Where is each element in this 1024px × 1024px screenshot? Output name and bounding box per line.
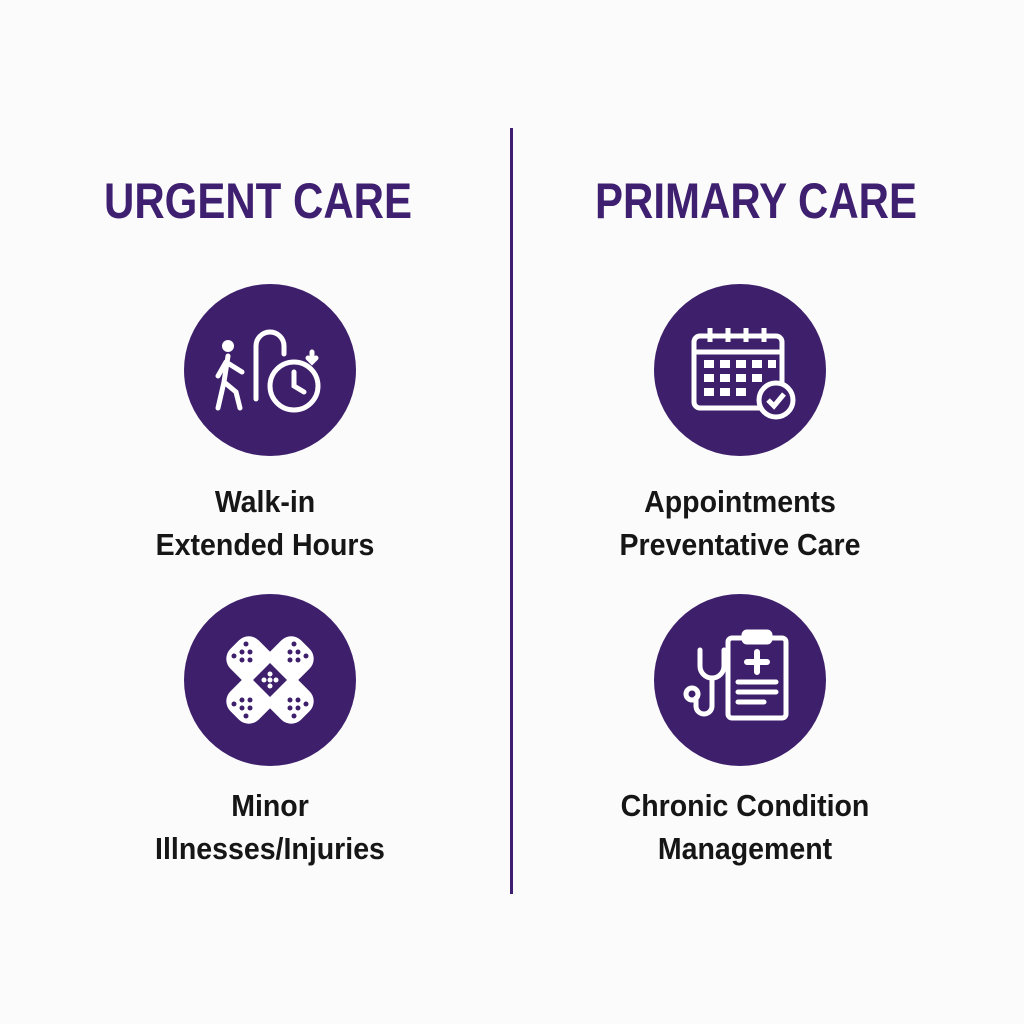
title: primary care: PRIMARY CARE bbox=[595, 173, 917, 229]
text: walk-in: Walk-in bbox=[215, 484, 315, 519]
icon: calendar bbox=[654, 284, 826, 456]
text: chronic condition bbox=[621, 788, 869, 866]
text: minor illnesses bbox=[155, 788, 385, 866]
divider bbox=[510, 128, 513, 894]
text: walk-in bbox=[156, 484, 374, 562]
text: chronic condition: Management bbox=[658, 831, 832, 866]
icon: stethoscope clipboard bbox=[654, 594, 826, 766]
icon: walk-in clock bbox=[184, 284, 356, 456]
text: appointments: Preventative Care bbox=[620, 527, 860, 562]
text: appointments bbox=[620, 484, 860, 562]
text: chronic condition: Chronic Condition bbox=[621, 788, 869, 823]
text: minor illnesses: Minor bbox=[231, 788, 309, 823]
icon: bandage bbox=[184, 594, 356, 766]
text: walk-in: Extended Hours bbox=[156, 527, 374, 562]
title: urgent care: URGENT CARE bbox=[104, 173, 412, 229]
text: minor illnesses: Illnesses/Injuries bbox=[155, 831, 385, 866]
text: appointments: Appointments bbox=[644, 484, 836, 519]
